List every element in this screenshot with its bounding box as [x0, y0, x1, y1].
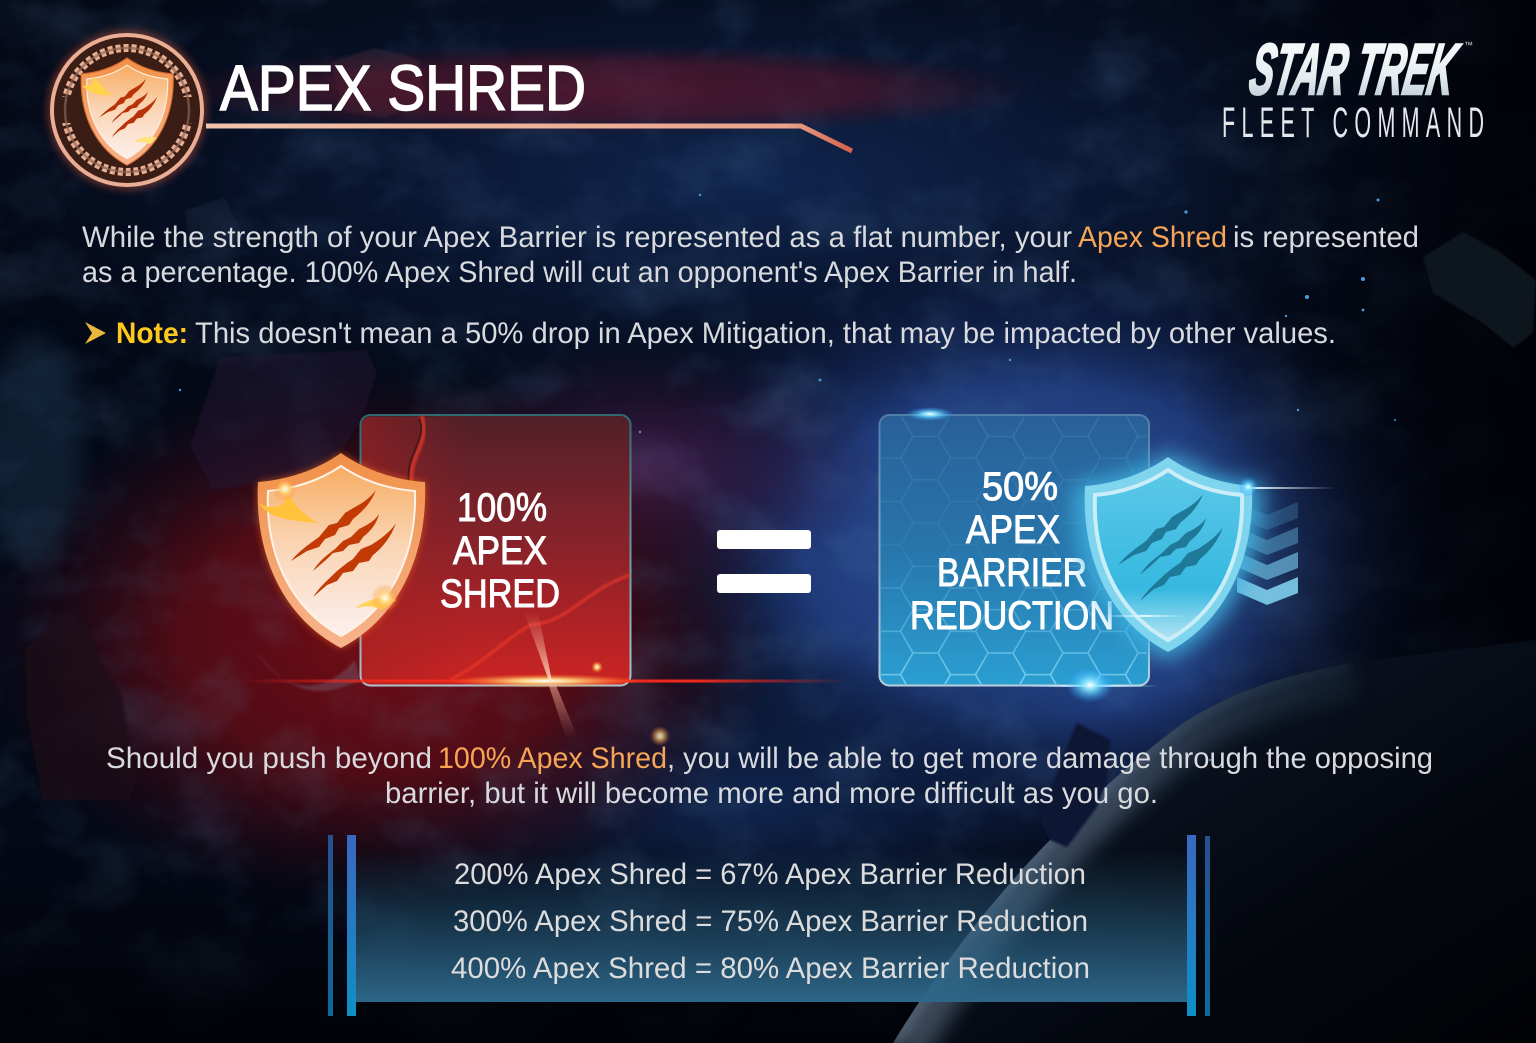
- logo: Star Trek Fleet Command: FLEET COMMAND: [1222, 99, 1484, 147]
- panel: shred to reduction table: [328, 835, 1210, 1016]
- closing paragraph: , you will be able to get more damage through the opposing: [667, 742, 1433, 775]
- label: 100% apex shred: [440, 486, 560, 616]
- label: 100% apex shred: SHRED: [440, 572, 560, 616]
- intro paragraph: While the strength of your Apex Barrier is represented as a flat number, your: [82, 221, 1072, 254]
- intro paragraph: is represented: [1233, 221, 1419, 254]
- note callout: Note:: [116, 317, 188, 350]
- icon: red shield: [258, 453, 425, 648]
- label: 50% apex barrier reduction: APEX: [966, 508, 1060, 552]
- label: 50% apex barrier reduction: 50%: [982, 465, 1058, 509]
- title: APEX SHRED: [220, 52, 586, 124]
- intro paragraph: as a percentage. 100% Apex Shred will cut an opponent's Apex Barrier in half.: [82, 256, 1077, 289]
- intro paragraph: [82, 221, 1419, 289]
- panel: 100% apex shred: [240, 415, 850, 746]
- table rows: 300% Apex Shred = 75% Apex Barrier Reduction: [453, 905, 1088, 938]
- closing paragraph: [106, 742, 1433, 810]
- label: 50% apex barrier reduction: [910, 465, 1114, 638]
- table rows: 200% Apex Shred = 67% Apex Barrier Reduction: [454, 858, 1086, 891]
- equals sign: [717, 530, 811, 593]
- header red band: [160, 44, 1040, 136]
- icon: blue shield with chevrons: [1075, 453, 1336, 659]
- intro paragraph: Apex Shred: [1078, 221, 1227, 254]
- label: 50% apex barrier reduction: BARRIER: [937, 551, 1087, 595]
- label: 100% apex shred: APEX: [453, 529, 547, 573]
- title underline: [206, 126, 852, 151]
- logo: Star Trek Fleet Command: ™: [1464, 40, 1473, 50]
- label: 50% apex barrier reduction: REDUCTION: [910, 594, 1114, 638]
- icon: apex shred badge: [47, 30, 207, 190]
- closing paragraph: Should you push beyond: [106, 742, 432, 775]
- panel: 50% apex barrier reduction: [880, 407, 1160, 703]
- closing paragraph: 100% Apex Shred: [438, 742, 667, 775]
- label: 100% apex shred: 100%: [457, 486, 547, 530]
- table rows: [451, 858, 1090, 985]
- note callout: This doesn't mean a 50% drop in Apex Mitigation, that may be impacted by other values.: [195, 317, 1336, 350]
- closing paragraph: barrier, but it will become more and more difficult as you go.: [385, 777, 1158, 810]
- table rows: 400% Apex Shred = 80% Apex Barrier Reduction: [451, 952, 1090, 985]
- logo: Star Trek Fleet Command: [1222, 29, 1484, 147]
